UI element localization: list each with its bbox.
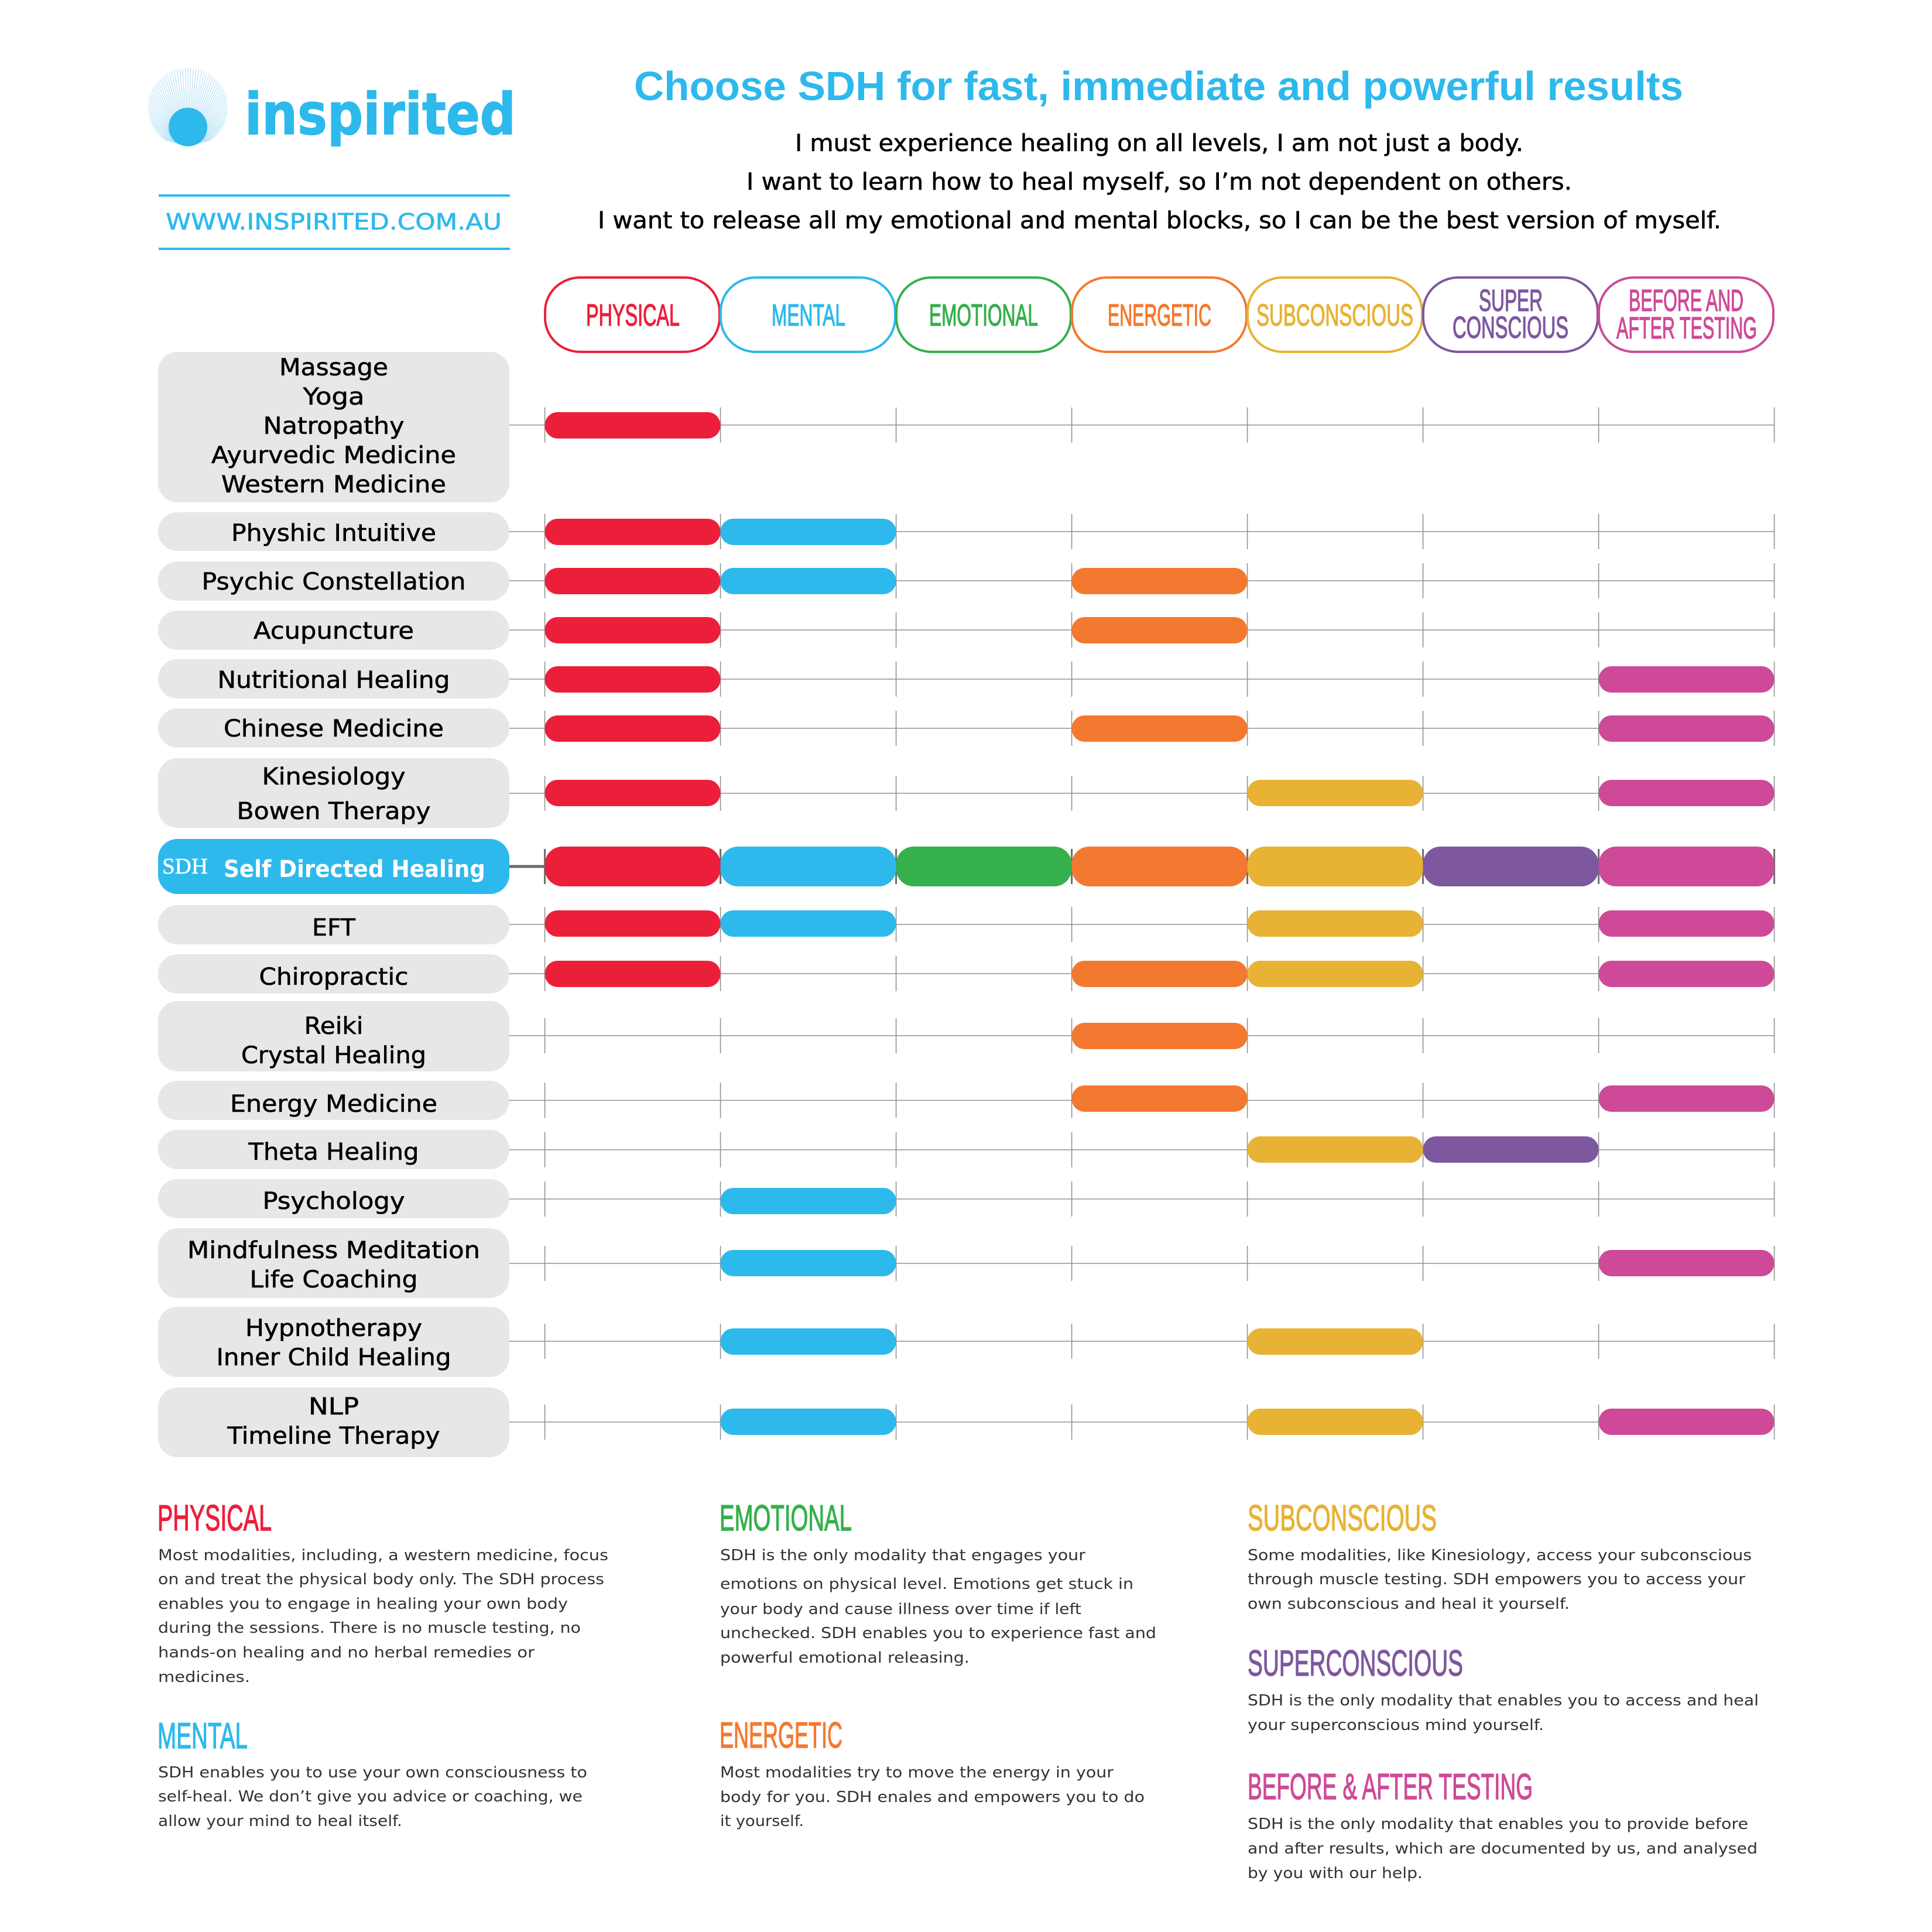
description: physical: medicines. (158, 1669, 250, 1686)
label: massage group: Natropathy (263, 413, 404, 440)
website link block (159, 194, 510, 250)
label: nlp and timeline therapy: Timeline Therapy (227, 1423, 440, 1450)
header: emotional: EMOTIONAL (929, 299, 1038, 333)
label: massage group: Yoga (302, 383, 364, 410)
header: before and after testing: BEFORE AND (1629, 284, 1743, 318)
label: chinese medicine (158, 708, 509, 748)
description: superconscious: SDH is the only modality that enables you to access and heal (1248, 1692, 1759, 1710)
description: subconscious: own subconscious and heal it yourself. (1248, 1595, 1570, 1613)
header: physical (545, 278, 720, 352)
description: subconscious: Some modalities, like Kinesiology, access your subconscious (1248, 1547, 1752, 1564)
label: nutritional healing (158, 659, 509, 698)
label: chinese medicine: Chinese Medicine (224, 715, 444, 742)
label: psychology (158, 1179, 509, 1218)
icon: sunburst (148, 68, 228, 146)
label: massage group: Ayurvedic Medicine (211, 442, 456, 469)
description: subconscious (1248, 1498, 1752, 1613)
label: psychic constellation (158, 561, 509, 601)
description: emotional: powerful emotional releasing. (720, 1649, 970, 1667)
label: reiki and crystal healing (158, 1001, 509, 1071)
description: mental (157, 1716, 587, 1830)
row: mindfulness meditation and life coaching (509, 1246, 1775, 1281)
description: mental: MENTAL (157, 1716, 248, 1756)
label: nlp and timeline therapy (158, 1388, 509, 1457)
label: physhic intuitive: Physhic Intuitive (231, 520, 436, 547)
label: hypnotherapy and inner child healing: Hypnotherapy (245, 1315, 422, 1342)
description: physical: PHYSICAL (157, 1498, 272, 1539)
label: massage group (158, 352, 509, 502)
description: physical: hands-on healing and no herbal remedies or (158, 1644, 535, 1662)
label: reiki and crystal healing: Crystal Healing (241, 1042, 426, 1069)
header: energetic: ENERGETIC (1108, 299, 1211, 333)
comparison chart (509, 407, 1775, 1440)
description: mental: SDH enables you to use your own consciousness to (158, 1764, 587, 1782)
description: physical: Most modalities, including, a western medicine, focus (158, 1547, 608, 1564)
label: mindfulness meditation and life coaching (158, 1228, 509, 1298)
row: psychology (509, 1181, 1775, 1217)
description: superconscious (1248, 1643, 1759, 1734)
row: psychic constellation (509, 563, 1775, 598)
row: eft (509, 907, 1775, 942)
header: super conscious (1423, 278, 1598, 352)
header: subconscious (1248, 278, 1422, 352)
header: energetic (1072, 278, 1246, 352)
label: eft (158, 905, 509, 944)
description: before and after testing: BEFORE & AFTER TESTING (1248, 1767, 1533, 1807)
label: nutritional healing: Nutritional Healing (218, 667, 450, 694)
logo wordmark: inspirited (245, 81, 516, 148)
description: energetic (720, 1715, 1145, 1830)
label: mindfulness meditation and life coaching: Life Coaching (249, 1266, 418, 1293)
row: reiki and crystal healing (509, 1018, 1775, 1053)
description: subconscious: through muscle testing. SDH empowers you to access your (1248, 1571, 1745, 1588)
row: massage group (509, 407, 1775, 443)
description: physical: enables you to engage in healing your own body (158, 1595, 568, 1613)
description: emotional: EMOTIONAL (720, 1498, 852, 1539)
description: emotional: your body and cause illness over time if left (720, 1601, 1081, 1618)
description: physical: on and treat the physical body only. The SDH process (158, 1571, 604, 1588)
label: chiropractic (158, 954, 509, 994)
row: physhic intuitive (509, 514, 1775, 549)
label: massage group: Western Medicine (221, 471, 446, 498)
label: kinesiology and bowen therapy: Bowen Therapy (237, 798, 431, 825)
description: energetic: Most modalities try to move the energy in your (720, 1764, 1114, 1782)
intro statements: I want to learn how to heal myself, so I’m not dependent on others. (746, 169, 1572, 196)
header: mental: MENTAL (772, 299, 845, 333)
label: nlp and timeline therapy: NLP (309, 1393, 359, 1420)
label: reiki and crystal healing: Reiki (304, 1013, 363, 1040)
label: self directed healing: SDH (162, 854, 208, 879)
label: psychic constellation: Psychic Constellation (201, 568, 466, 595)
description: mental: allow your mind to heal itself. (158, 1813, 402, 1830)
description: before and after testing (1248, 1767, 1758, 1882)
header: mental (721, 278, 895, 352)
description: superconscious: your superconscious mind yourself. (1248, 1717, 1544, 1734)
header: before and after testing (1599, 278, 1773, 352)
description: physical: during the sessions. There is no muscle testing, no (158, 1619, 581, 1637)
label: physhic intuitive (158, 512, 509, 551)
label: mindfulness meditation and life coaching: Mindfulness Meditation (187, 1237, 480, 1264)
description: superconscious: SUPERCONSCIOUS (1248, 1643, 1463, 1684)
label: kinesiology and bowen therapy (158, 758, 509, 828)
intro statements: I must experience healing on all levels, I am not just a body. (795, 130, 1523, 157)
label: eft: EFT (312, 914, 356, 941)
description: before and after testing: SDH is the only modality that enables you to provide before (1248, 1815, 1748, 1833)
row: hypnotherapy and inner child healing (509, 1324, 1775, 1359)
description: emotional: emotions on physical level. Emotions get stuck in (720, 1575, 1133, 1593)
logo: inspirited (148, 68, 516, 148)
header: before and after testing: AFTER TESTING (1616, 311, 1757, 345)
row: nlp and timeline therapy (509, 1405, 1775, 1440)
row: theta healing (509, 1132, 1775, 1167)
description: emotional (720, 1498, 1156, 1667)
intro statements (598, 130, 1721, 234)
row: kinesiology and bowen therapy (509, 776, 1775, 811)
column headers (545, 278, 1773, 352)
label: self directed healing (158, 839, 509, 894)
header: super conscious: CONSCIOUS (1453, 311, 1568, 345)
row: self directed healing (509, 847, 1775, 886)
label: massage group: Massage (279, 354, 388, 381)
label: hypnotherapy and inner child healing (158, 1307, 509, 1377)
description: before and after testing: and after results, which are documented by us, and analysed (1248, 1840, 1758, 1858)
description: before and after testing: by you with our help. (1248, 1865, 1423, 1882)
modality labels (158, 352, 509, 1457)
label: self directed healing: Self Directed Healing (224, 856, 485, 883)
row: acupuncture (509, 612, 1775, 648)
label: acupuncture: Acupuncture (254, 618, 414, 645)
row: energy medicine (509, 1083, 1775, 1118)
description: physical (157, 1498, 608, 1686)
label: chiropractic: Chiropractic (259, 964, 409, 991)
label: hypnotherapy and inner child healing: Inner Child Healing (217, 1344, 451, 1371)
row: chiropractic (509, 956, 1775, 991)
row: chinese medicine (509, 711, 1775, 746)
description: mental: self-heal. We don’t give you advice or coaching, we (158, 1788, 583, 1806)
description: emotional: unchecked. SDH enables you to experience fast and (720, 1625, 1156, 1642)
header: super conscious: SUPER (1479, 284, 1543, 318)
label: energy medicine (158, 1081, 509, 1120)
intro statements: I want to release all my emotional and mental blocks, so I can be the best version of myself. (598, 207, 1721, 234)
label: theta healing: Theta Healing (248, 1139, 419, 1166)
label: theta healing (158, 1130, 509, 1169)
label: acupuncture (158, 611, 509, 650)
header: physical: PHYSICAL (586, 299, 680, 333)
description: energetic: it yourself. (720, 1813, 804, 1830)
description: energetic: body for you. SDH enales and empowers you to do (720, 1789, 1145, 1806)
label: kinesiology and bowen therapy: Kinesiology (262, 763, 405, 790)
row: nutritional healing (509, 662, 1775, 697)
label: energy medicine: Energy Medicine (230, 1091, 437, 1118)
description: emotional: SDH is the only modality that engages your (720, 1547, 1085, 1564)
header: emotional (896, 278, 1071, 352)
label: psychology: Psychology (262, 1188, 405, 1215)
description: energetic: ENERGETIC (720, 1715, 842, 1756)
website link block: WWW.INSPIRITED.COM.AU (166, 209, 502, 235)
header: subconscious: SUBCONSCIOUS (1256, 299, 1413, 333)
title: Choose SDH for fast, immediate and powerful results (634, 63, 1683, 109)
description: subconscious: SUBCONSCIOUS (1248, 1498, 1437, 1539)
